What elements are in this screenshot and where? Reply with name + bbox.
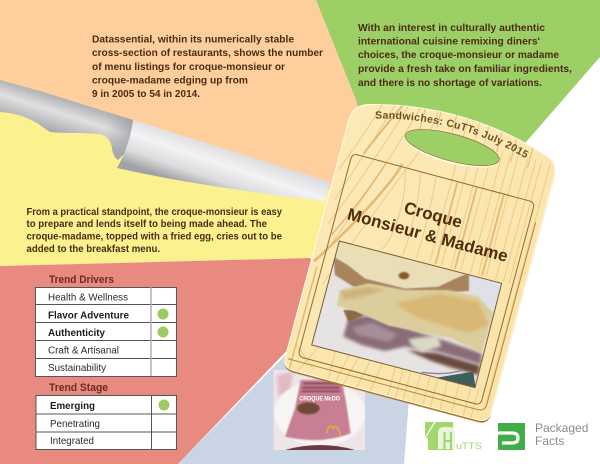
knife handle bolster shading — [105, 111, 133, 160]
text block: culturally authentic: With an interest in culturally authentic — [358, 22, 545, 34]
knife blade — [117, 120, 330, 201]
table: trend drivers: Health & Wellness — [48, 292, 128, 304]
board title: Croque: Croque — [402, 198, 464, 232]
knife — [0, 80, 330, 201]
text block: culturally authentic: provide a fresh take on familiar ingredients, — [358, 63, 572, 75]
text block: culturally authentic: choices, the croque-monsieur or madame — [358, 49, 559, 61]
logo square — [498, 423, 525, 450]
wood grain — [288, 104, 551, 418]
table: trend stage — [36, 395, 176, 450]
panel: blue wedge — [178, 310, 412, 464]
photo: McDonald's Croque McDo box — [273, 370, 366, 450]
panel: peach wedge — [0, 0, 360, 200]
heading: Trend Drivers: Trend Drivers — [49, 274, 114, 286]
box label: CROQUE McDO — [299, 396, 340, 403]
board surface — [282, 89, 563, 423]
board outer groove — [288, 169, 536, 412]
text block: practical standpoint: to prepare and lends itself to being made ahead. The — [26, 218, 267, 230]
table: trend drivers: Authenticity — [48, 327, 105, 339]
logo text: Facts: Facts — [535, 434, 564, 448]
table: trend drivers: Sustainability — [48, 362, 107, 374]
logo: Packaged Facts — [498, 421, 588, 450]
board text: Sandwiches CuTTs July 2015: Sandwiches: CuTTs July 2015 — [376, 111, 529, 158]
table: trend drivers: Flavor Adventure — [48, 310, 129, 322]
panel: green wedge — [316, 0, 600, 195]
text block: culturally authentic: and there is no shortage of variations. — [358, 77, 542, 89]
text block: Datassential — [92, 34, 323, 100]
cutting board — [284, 104, 556, 423]
table: trend stage: Penetrating — [50, 418, 100, 430]
text block: practical standpoint: From a practical standpoint, the croque-monsieur is easy — [26, 206, 282, 218]
board title: Monsieur & Madame: Monsieur & Madame — [345, 205, 510, 266]
logo: CuTTs — [425, 422, 482, 452]
board shadow edge — [282, 91, 563, 425]
table: trend drivers: Craft & Artisanal — [48, 344, 119, 356]
text block: Datassential: cross-section of restaurants, shows the number — [92, 47, 323, 59]
panel: yellow wedge — [0, 95, 345, 266]
panel: red wedge — [0, 258, 345, 464]
text block: practical standpoint: added to the breakfast menu. — [26, 243, 160, 255]
table: trend drivers — [35, 287, 176, 376]
photo: croque sandwich — [312, 238, 505, 388]
text block: practical standpoint — [26, 206, 282, 255]
logo mark — [425, 422, 453, 450]
text block: Datassential: of menu listings for croque-monsieur or — [92, 61, 285, 73]
text block: practical standpoint: croque-madame, topped with a fried egg, cries out to be — [26, 230, 282, 242]
text block: Datassential: croque-madame edging up from — [92, 74, 248, 86]
table: trend stage: Integrated — [50, 435, 94, 447]
text block: Datassential: Datassential, within its numerically stable — [92, 34, 294, 46]
table: trend stage: Emerging — [50, 400, 95, 412]
inner border — [298, 153, 535, 405]
knife handle — [0, 80, 133, 160]
logo word: uTTS — [456, 441, 482, 452]
logo text: Packaged: Packaged — [535, 421, 588, 435]
text block: Datassential: 9 in 2005 to 54 in 2014. — [92, 88, 200, 100]
heading: Trend Stage: Trend Stage — [49, 382, 108, 394]
board handle hole — [401, 122, 503, 175]
text block: culturally authentic — [358, 22, 572, 89]
text block: culturally authentic: international cuisine remixing diners' — [358, 36, 540, 48]
